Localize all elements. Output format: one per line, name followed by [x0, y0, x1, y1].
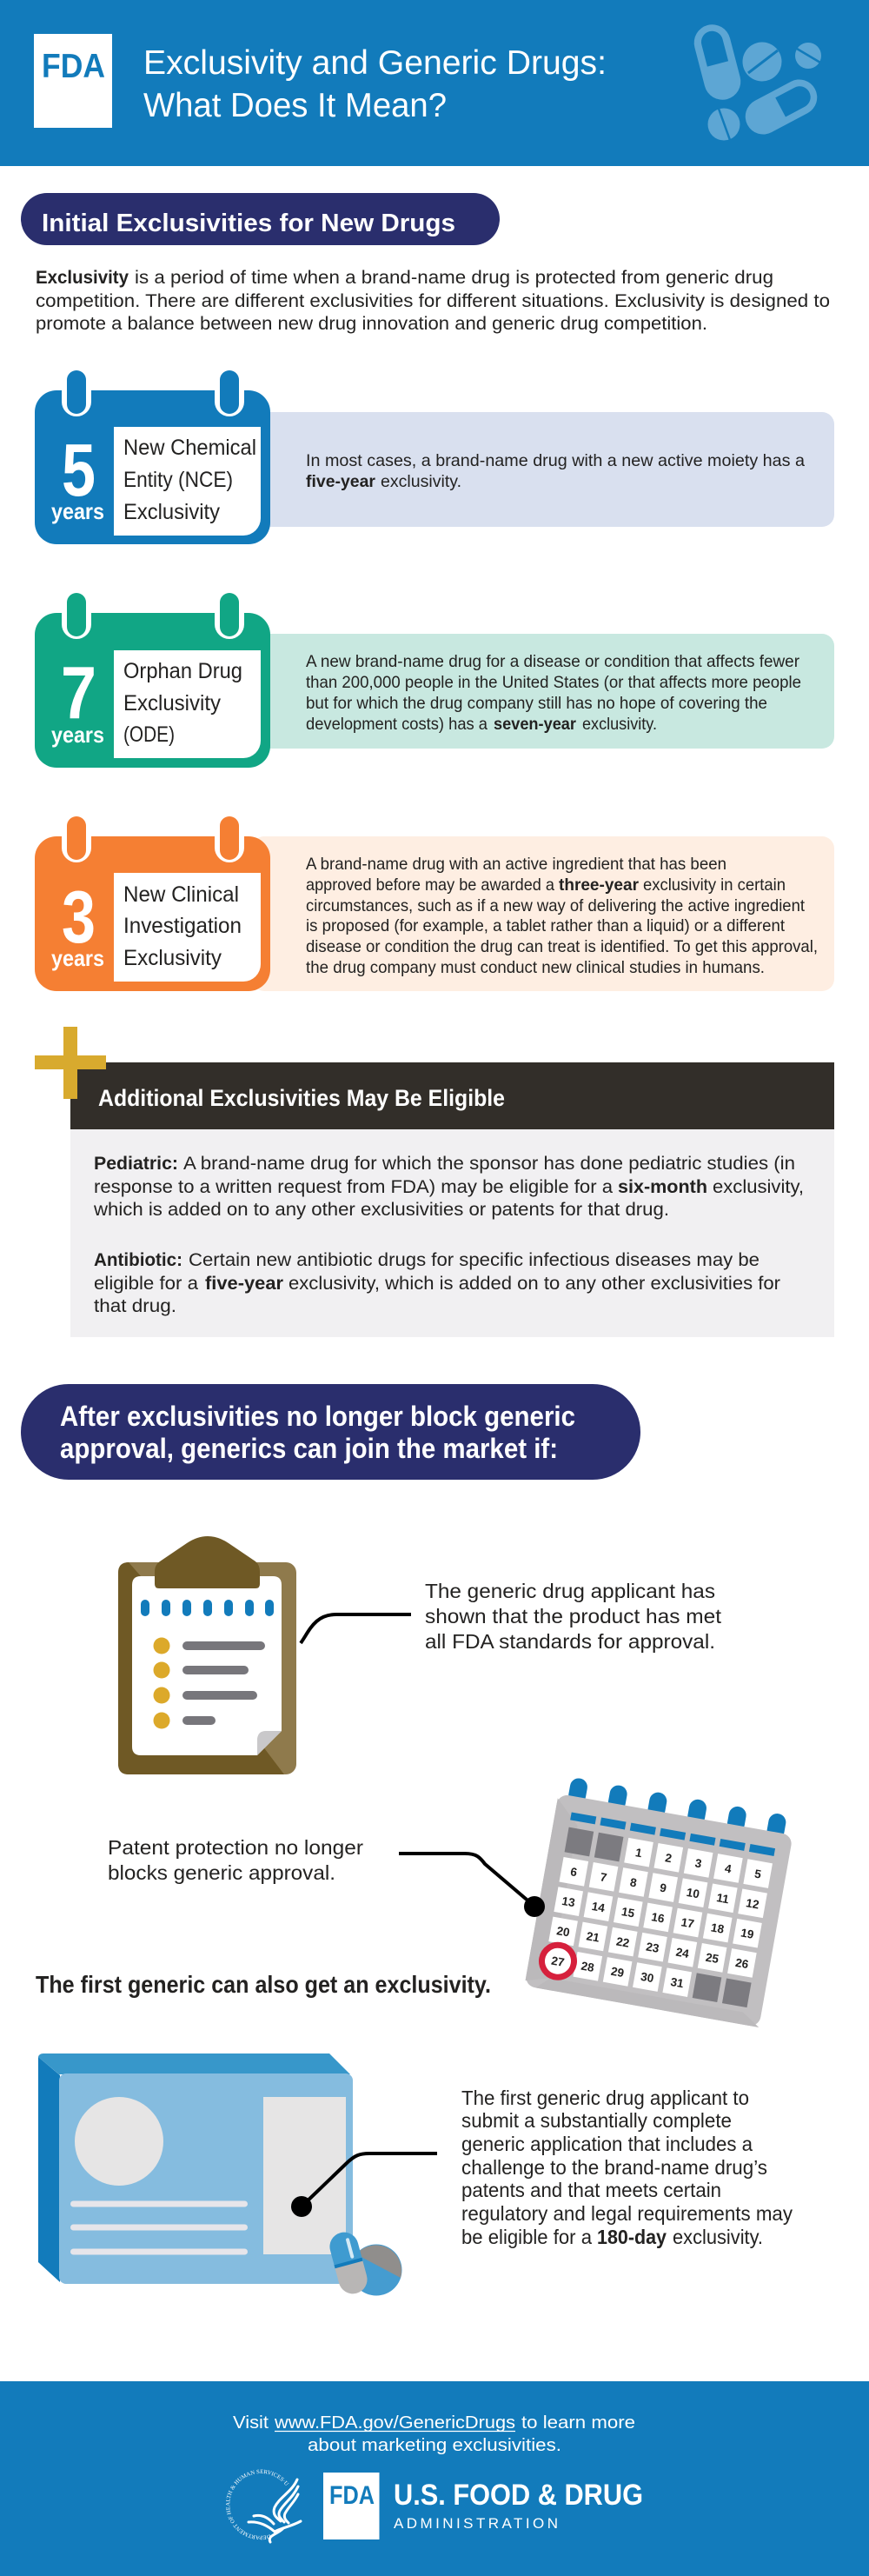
panel: seven-year orphan drug exclusivity	[35, 593, 834, 768]
additional exclusivities body: exclusivity, which is added on to any other exclusivities for	[289, 1274, 780, 1294]
heading: after exclusivities: After exclusivities no longer block generic	[60, 1401, 575, 1432]
agency wordmark	[394, 2479, 643, 2532]
description panel: A new brand-name drug for a disease or condition that affects fewer	[306, 652, 799, 671]
icon: calendar month: 9	[659, 1881, 667, 1895]
title: What Does It Mean?	[143, 87, 447, 124]
icon: pills	[690, 21, 823, 141]
additional exclusivities body: A brand-name drug for which the sponsor has done pediatric studies (in	[183, 1154, 795, 1174]
intro text: promote a balance between new drug innovation and generic drug competition.	[36, 313, 707, 334]
description panel: seven-year	[494, 715, 576, 734]
FDA logo	[34, 34, 112, 128]
icon: calendar month: 2	[664, 1851, 673, 1865]
panel: additional exclusivities	[35, 1027, 834, 1337]
icon: HHS seal: DEPARTMENT OF HEALTH & HUMAN SERVICES·USA	[226, 2469, 289, 2540]
icon: clipboard	[118, 1536, 296, 1774]
description panel: but for which the drug company still has no hope of covering the	[306, 694, 767, 713]
icon: calendar month: 18	[710, 1920, 726, 1936]
heading: after exclusivities	[21, 1384, 640, 1480]
heading: initial exclusivities	[21, 193, 500, 245]
description panel: exclusivity.	[582, 715, 657, 734]
text: 180-day exclusivity: be eligible for a	[461, 2226, 592, 2248]
icon: plus	[35, 1027, 106, 1099]
header banner	[0, 0, 869, 166]
icon: calendar 3 years: Exclusivity	[123, 946, 222, 970]
icon: calendar month: 10	[686, 1886, 700, 1900]
icon: calendar 7 years: 7	[61, 652, 96, 735]
title: Exclusivity and Generic Drugs:	[143, 44, 607, 82]
title	[143, 44, 607, 124]
text: FDA standards: shown that the product has met	[425, 1605, 722, 1627]
additional exclusivities body: exclusivity,	[713, 1177, 804, 1197]
icon: calendar month: 22	[615, 1934, 630, 1950]
description panel: three-year	[559, 875, 639, 895]
text: 180-day exclusivity: exclusivity.	[673, 2226, 763, 2248]
icon: calendar month: 6	[569, 1865, 579, 1879]
icon: calendar month: 12	[745, 1896, 760, 1912]
text: FDA standards: The generic drug applicant has	[425, 1580, 715, 1602]
text: 180-day exclusivity: generic application that includes a	[461, 2133, 753, 2155]
icon: calendar 7 years: Exclusivity	[123, 691, 221, 716]
description panel: exclusivity.	[381, 472, 461, 491]
icon: calendar 7 years: (ODE)	[123, 722, 175, 747]
icon: HHS seal	[226, 2469, 302, 2544]
text: patent protection: blocks generic approval.	[108, 1861, 335, 1884]
additional exclusivities body: Certain new antibiotic drugs for specific infectious diseases may be	[189, 1250, 760, 1270]
connector: clipboard to text	[301, 1614, 411, 1643]
icon: calendar month: 5	[753, 1867, 763, 1881]
description panel: A brand-name drug with an active ingredient that has been	[306, 855, 726, 874]
icon: calendar month: 13	[561, 1894, 576, 1909]
icon: calendar month: 29	[610, 1965, 625, 1980]
text: 180-day exclusivity: challenge to the brand-name drug’s	[461, 2156, 767, 2179]
heading: initial exclusivities: Initial Exclusivities for New Drugs	[42, 210, 455, 237]
intro text: competition. There are different exclusivities for different situations. Exclusivity is designed to	[36, 290, 830, 311]
additional exclusivities body	[70, 1129, 834, 1337]
additional exclusivities body: Pediatric:	[94, 1154, 178, 1174]
heading bar	[70, 1062, 834, 1129]
text: FDA standards: all FDA standards for approval.	[425, 1630, 715, 1653]
icon: calendar 7 years: years	[51, 722, 104, 748]
additional exclusivities body: response to a written request from FDA) may be eligible for a	[94, 1177, 613, 1197]
footer text: Visit	[233, 2413, 269, 2433]
icon: calendar month: 16	[650, 1910, 666, 1926]
icon: calendar 5 years: 5	[62, 429, 96, 512]
description panel: development costs) has a	[306, 715, 488, 734]
icon: calendar month: 1	[634, 1846, 643, 1860]
connector: patent text to calendar	[399, 1854, 545, 1917]
icon: calendar 3 years	[35, 816, 270, 991]
additional exclusivities body: eligible for a	[94, 1274, 198, 1294]
panel: five-year NCE exclusivity	[35, 370, 834, 544]
intro text	[36, 267, 830, 334]
additional exclusivities body: Antibiotic:	[94, 1250, 182, 1270]
agency wordmark: ADMINISTRATION	[394, 2515, 558, 2532]
FDA logo: FDA	[42, 48, 105, 85]
icon: calendar 7 years: Orphan Drug	[123, 659, 242, 683]
icon: calendar 3 years: Investigation	[123, 914, 242, 938]
intro text: is a period of time when a brand-name drug is protected from generic drug	[135, 267, 773, 288]
icon: calendar month: 8	[629, 1875, 638, 1890]
icon: calendar month: 15	[620, 1905, 636, 1920]
text: patent protection: Patent protection no longer	[108, 1836, 363, 1859]
icon: calendar month: 25	[705, 1951, 720, 1966]
footer text: to learn more	[521, 2413, 635, 2433]
icon: calendar 5 years: Exclusivity	[123, 500, 220, 524]
description panel: disease or condition the drug can treat is identified. To get this approval,	[306, 937, 818, 956]
icon: calendar month: 20	[555, 1924, 571, 1940]
additional exclusivities body: six-month	[618, 1177, 707, 1197]
icon: calendar 5 years: New Chemical	[123, 436, 256, 460]
FDA logo footer: FDA	[329, 2481, 375, 2510]
text: 180-day exclusivity: regulatory and legal requirements may	[461, 2202, 793, 2225]
connector: box to text	[291, 2153, 437, 2217]
icon: calendar month: 19	[740, 1926, 755, 1941]
icon: calendar 5 years: Entity (NCE)	[123, 468, 233, 492]
text: 180-day exclusivity	[461, 2087, 793, 2248]
icon: calendar month: 21	[586, 1929, 600, 1945]
icon: calendar 7 years	[35, 593, 270, 768]
icon: calendar month: 4	[724, 1861, 733, 1876]
icon: calendar month: 23	[645, 1940, 660, 1955]
icon: calendar 3 years: New Clinical	[123, 882, 239, 907]
icon: calendar 3 years: years	[51, 945, 104, 971]
icon: calendar month: 14	[591, 1900, 607, 1914]
icon: calendar month: 26	[734, 1956, 750, 1971]
icon: drug box with pills	[38, 2053, 401, 2297]
intro text: Exclusivity	[36, 267, 129, 288]
agency wordmark: U.S. FOOD & DRUG	[394, 2479, 643, 2512]
footer text	[233, 2413, 635, 2455]
icon: calendar month: 31	[669, 1975, 685, 1990]
description panel: the drug company must conduct new clinical studies in humans.	[306, 958, 765, 977]
text: 180-day exclusivity: submit a substantially complete	[461, 2109, 732, 2132]
description panel	[252, 412, 834, 527]
heading: after exclusivities: approval, generics can join the market if:	[60, 1433, 558, 1464]
additional exclusivities body: which is added on to any other exclusivities or patents for that drug.	[93, 1200, 669, 1220]
icon: calendar month: 30	[640, 1970, 655, 1985]
heading bar: Additional Exclusivities May Be Eligible	[98, 1085, 505, 1111]
subheading: first generic: The first generic can also get an exclusivity.	[36, 1971, 491, 1998]
description panel	[252, 634, 834, 749]
icon: calendar month: 11	[715, 1891, 731, 1906]
description panel: In most cases, a brand-name drug with a new active moiety has a	[306, 451, 805, 470]
icon: calendar month: 27	[550, 1954, 566, 1969]
description panel: five-year	[306, 472, 375, 491]
icon: calendar month	[524, 1775, 796, 2027]
icon: calendar 5 years	[35, 370, 270, 544]
FDA logo footer	[323, 2473, 379, 2539]
icon: calendar 3 years: 3	[62, 876, 96, 959]
text: 180-day exclusivity: 180-day	[597, 2226, 667, 2248]
description panel: circumstances, such as if a new way of delivering the active ingredient	[306, 896, 806, 915]
icon: calendar month: 7	[599, 1870, 607, 1884]
description panel: than 200,000 people in the United States (or that affects more people	[306, 673, 801, 692]
text: patent protection	[108, 1836, 363, 1884]
text: 180-day exclusivity: patents and that meets certain	[461, 2179, 721, 2201]
footer text: about marketing exclusivities.	[308, 2435, 561, 2455]
description panel	[252, 836, 834, 991]
additional exclusivities body: that drug.	[94, 1296, 176, 1316]
text: FDA standards	[425, 1580, 722, 1653]
icon: calendar 5 years: years	[51, 498, 104, 524]
icon: calendar month: 24	[675, 1946, 690, 1960]
description panel: is proposed (for example, a tablet rather than a liquid) or a different	[306, 916, 786, 935]
icon: calendar month: 28	[580, 1960, 595, 1974]
text: 180-day exclusivity: The first generic drug applicant to	[461, 2087, 749, 2109]
description panel: exclusivity in certain	[643, 875, 786, 895]
icon: calendar month: 3	[694, 1856, 703, 1871]
footer text: www.FDA.gov/GenericDrugs	[274, 2413, 515, 2433]
panel: three-year new clinical investigation exclusivity	[35, 816, 834, 991]
description panel: approved before may be awarded a	[306, 875, 554, 895]
icon: calendar month: 17	[680, 1915, 695, 1931]
additional exclusivities body: five-year	[205, 1274, 283, 1294]
